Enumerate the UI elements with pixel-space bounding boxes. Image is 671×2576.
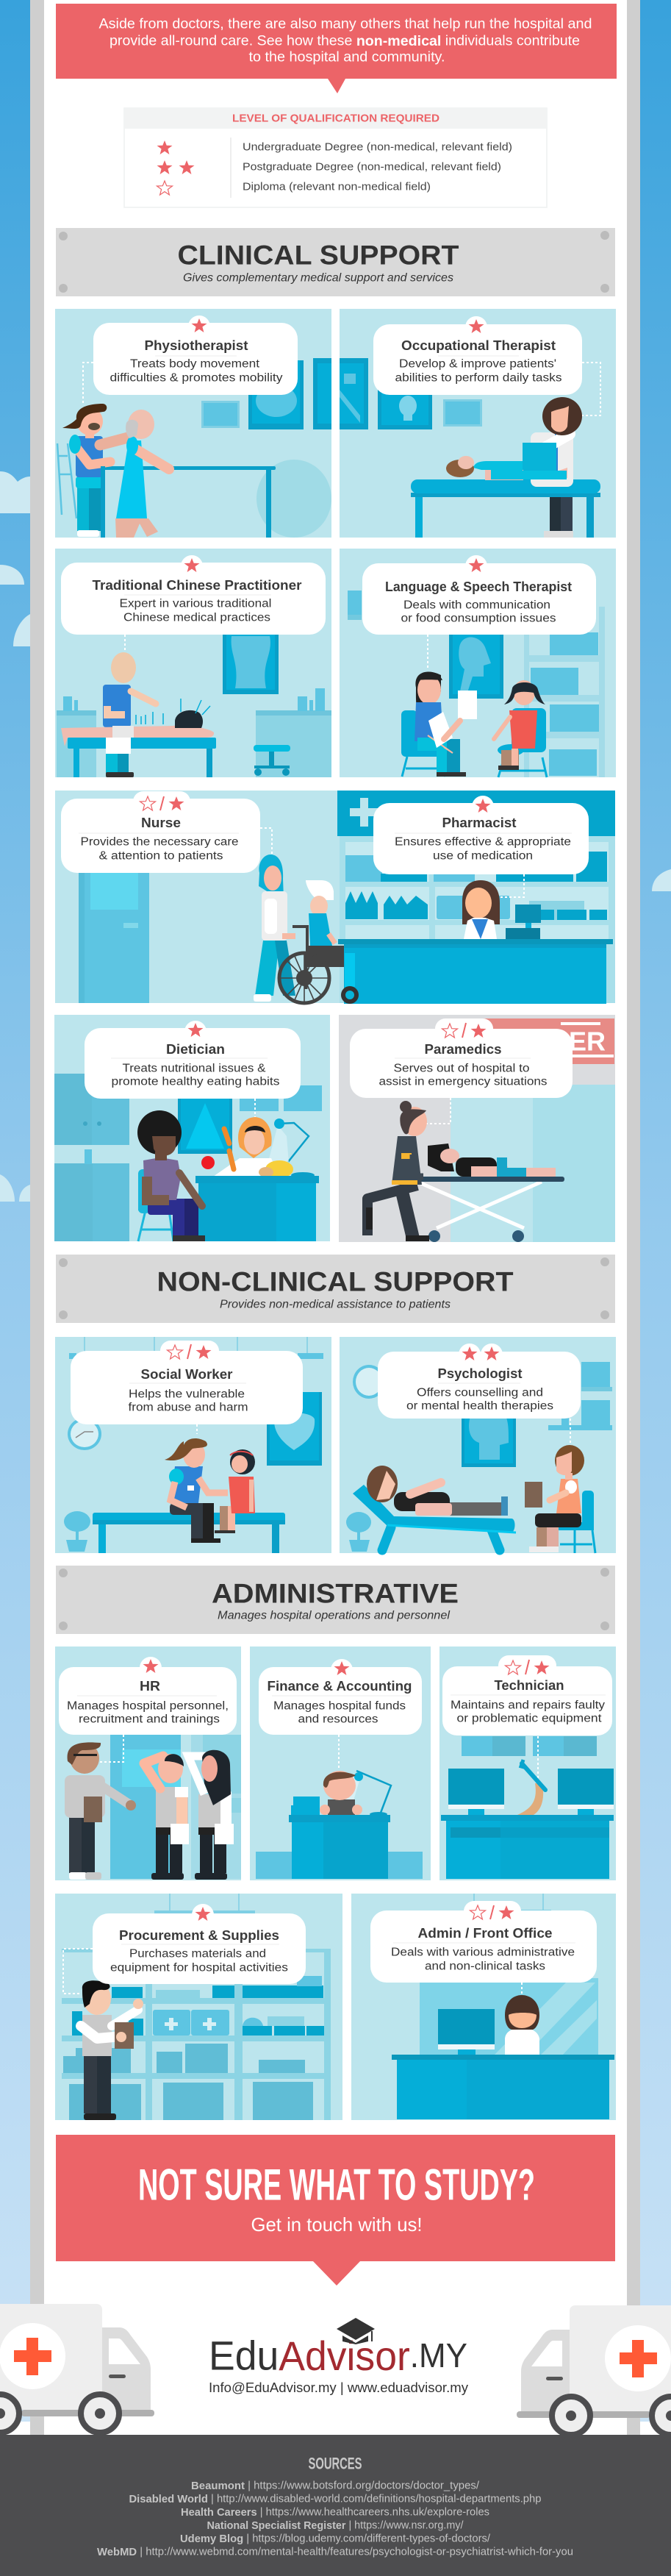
info card: pharmacist: Pharmacist — [442, 816, 516, 830]
info card: pharmacist — [373, 796, 589, 874]
panel: language and speech therapist — [340, 549, 616, 777]
info card: psychologist — [378, 1344, 581, 1419]
info card: social worker: Social Worker — [141, 1367, 232, 1382]
info card: psychologist: Offers counselling and — [417, 1387, 543, 1399]
info card: nurse: & attention to patients — [98, 850, 223, 862]
info card: traditional chinese practitioner — [61, 555, 326, 635]
sources footer: National Specialist Register | https://www.nsr.org.my/ — [207, 2519, 464, 2531]
section heading: clinical support: CLINICAL SUPPORT — [178, 240, 459, 271]
panel: physiotherapist — [55, 309, 331, 538]
intro banner: to the hospital and community. — [248, 50, 445, 65]
info card: occupational therapist: Occupational Therapist — [401, 338, 556, 353]
legend: level of qualification: LEVEL OF QUALIFICATION REQUIRED — [232, 112, 439, 125]
info card: hr: recruitment and trainings — [79, 1713, 220, 1725]
panel: dietician — [54, 1015, 330, 1241]
illustration: reception scene — [392, 1894, 614, 2119]
illustration: speech therapy scene — [348, 591, 605, 777]
info card: occupational therapist: Develop & improve patients' — [399, 357, 556, 371]
section heading: administrative: ADMINISTRATIVE — [212, 1578, 459, 1609]
illustration: dietician scene — [54, 1074, 322, 1241]
call to action banner: Get in touch with us! — [251, 2213, 422, 2236]
info card: physiotherapist — [93, 315, 298, 395]
panel: occupational therapist — [340, 309, 616, 538]
sources footer: Health Careers | https://www.healthcareers.nhs.uk/explore-roles — [181, 2506, 489, 2518]
section heading: non-clinical support: NON-CLINICAL SUPPORT — [157, 1266, 514, 1297]
info card: procurement and supplies: Purchases materials and — [129, 1947, 266, 1960]
call to action banner — [56, 2135, 615, 2286]
info card: traditional chinese practitioner: Traditional Chinese Practitioner — [93, 578, 301, 593]
info card: admin and front office: Deals with various administrative — [391, 1946, 575, 1959]
info card: technician — [442, 1655, 612, 1735]
info card: nurse: Provides the necessary care — [81, 835, 238, 849]
info card: paramedics: Serves out of hospital to — [394, 1062, 529, 1075]
section heading: administrative: Manages hospital operations and personnel — [218, 1609, 450, 1622]
info card: technician: Technician — [494, 1678, 564, 1693]
info card: hr: HR — [140, 1679, 160, 1694]
illustration: occupational therapy scene — [340, 358, 600, 538]
contact details: Info@EduAdvisor.my | www.eduadvisor.my — [209, 2380, 468, 2395]
illustration: door — [79, 873, 149, 1003]
legend: level of qualification: Postgraduate Degree (non-medical, relevant field) — [243, 160, 501, 174]
info card: pharmacist: use of medication — [433, 850, 533, 862]
info card: nurse: Nurse — [141, 816, 181, 830]
illustration: finance scene — [256, 1735, 423, 1879]
info card: technician: Maintains and repairs faulty — [451, 1699, 605, 1712]
panel: social worker — [55, 1337, 331, 1553]
illustration: technician scene — [441, 1736, 614, 1879]
section heading: clinical support: Gives complementary medical support and services — [183, 272, 453, 284]
info card: traditional chinese practitioner: Chinese medical practices — [123, 612, 270, 624]
panel: finance and accounting — [250, 1646, 431, 1880]
info card: occupational therapist: abilities to perform daily tasks — [395, 372, 562, 384]
illustration: paramedic scene — [339, 1015, 615, 1242]
illustration: pharmacy sign — [337, 791, 615, 836]
section heading: non-clinical support: Provides non-medical assistance to patients — [220, 1299, 451, 1310]
icon: right ambulance — [517, 2305, 671, 2435]
info card: admin and front office: Admin / Front Office — [417, 1926, 553, 1941]
info card: paramedics: assist in emergency situations — [379, 1075, 548, 1088]
panel: procurement and supplies — [55, 1894, 342, 2120]
info card: paramedics: Paramedics — [425, 1042, 501, 1057]
info card: dietician: Dietician — [166, 1042, 225, 1057]
info card: occupational therapist — [373, 316, 582, 395]
info card: social worker: from abuse and harm — [128, 1402, 248, 1413]
info card: paramedics — [350, 1018, 573, 1098]
panel: traditional chinese practitioner — [55, 549, 331, 777]
illustration: social worker scene — [64, 1337, 323, 1553]
info card: technician: or problematic equipment — [457, 1712, 602, 1725]
info card: language and speech therapist: Deals with communication — [403, 599, 550, 612]
info card: hr: Manages hospital personnel, — [67, 1700, 229, 1712]
section heading: clinical support — [56, 228, 615, 296]
logo: eduadvisor: EduAdvisor.MY — [209, 2333, 467, 2378]
illustration: pharmacist figure — [462, 880, 500, 939]
illustration: acupuncture scene — [57, 632, 331, 777]
panel: nurse and pharmacist scene — [55, 791, 615, 1004]
info card: physiotherapist: difficulties & promotes mobility — [110, 372, 283, 384]
info card: finance and accounting: Manages hospital funds — [273, 1700, 406, 1712]
info card: finance and accounting: and resources — [298, 1713, 378, 1725]
info card: dietician: promote healthy eating habits — [112, 1075, 280, 1088]
info card: language and speech therapist: Language & Speech Therapist — [385, 579, 572, 594]
intro banner: Aside from doctors, there are also many others that help run the hospital and — [98, 16, 592, 32]
info card: social worker — [71, 1341, 303, 1424]
panel: paramedics — [339, 1015, 615, 1242]
info card: nurse — [61, 791, 260, 873]
info card: physiotherapist: Treats body movement — [130, 357, 260, 371]
legend: level of qualification: Undergraduate Degree (non-medical, relevant field) — [243, 141, 512, 153]
section heading: non-clinical support — [56, 1255, 615, 1323]
info card: finance and accounting: Finance & Accounting — [268, 1679, 412, 1694]
info card: procurement and supplies: equipment for hospital activities — [110, 1962, 288, 1974]
illustration: hr scene — [65, 1735, 241, 1880]
info card: language and speech therapist — [362, 555, 596, 635]
info card: dietician: Treats nutritional issues & — [122, 1062, 266, 1075]
info card: social worker: Helps the vulnerable — [129, 1388, 245, 1400]
info card: physiotherapist: Physiotherapist — [144, 338, 248, 353]
legend: level of qualification — [124, 108, 547, 207]
illustration: pharmacy shelves and counter — [338, 836, 615, 1004]
info card: procurement and supplies — [93, 1904, 306, 1984]
sources footer: Beaumont | https://www.botsford.org/doctors/doctor_types/ — [191, 2480, 480, 2491]
sources footer — [0, 2435, 671, 2576]
info card: hr — [59, 1657, 237, 1735]
sources footer: Disabled World | http://www.disabled-world.com/definitions/hospital-departments.php — [129, 2493, 541, 2505]
intro banner — [56, 4, 617, 93]
info card: dietician — [85, 1021, 301, 1099]
info card: psychologist: Psychologist — [438, 1366, 522, 1381]
illustration: supply room scene — [62, 1894, 331, 2120]
info card: language and speech therapist: or food consumption issues — [401, 612, 556, 625]
illustration: psychologist scene — [346, 1362, 612, 1553]
info card: pharmacist: Ensures effective & appropriate — [395, 835, 571, 849]
info card: procurement and supplies: Procurement & Supplies — [119, 1928, 279, 1943]
panel: psychologist — [340, 1337, 616, 1553]
intro banner: provide all-round care. See how these non-medical individuals contribute — [110, 34, 580, 49]
panel: technician — [439, 1646, 616, 1880]
illustration: nurse and wheelchair patient — [254, 828, 524, 1004]
icon: left ambulance — [0, 2304, 154, 2433]
sources footer: WebMD | http://www.webmd.com/mental-health/features/psychologist-or-psychiatrist-which-for-you — [97, 2546, 573, 2558]
info card: psychologist: or mental health therapies — [406, 1400, 553, 1412]
info card: finance and accounting — [259, 1659, 422, 1735]
sources footer: Udemy Blog | https://blog.udemy.com/different-types-of-doctors/ — [180, 2533, 491, 2544]
info card: admin and front office — [370, 1901, 597, 1983]
panel: hr — [55, 1646, 241, 1880]
sources footer: SOURCES — [309, 2455, 362, 2472]
illustration: physiotherapy scene — [57, 358, 331, 538]
info card: traditional chinese practitioner: Expert in various traditional — [119, 597, 272, 610]
section heading: administrative — [56, 1566, 615, 1634]
legend: level of qualification: Diploma (relevant non-medical field) — [243, 181, 431, 193]
panel: admin and front office — [351, 1894, 616, 2120]
illustration: paramedic scene: ER — [569, 1027, 606, 1056]
info card: admin and front office: and non-clinical tasks — [425, 1960, 545, 1972]
